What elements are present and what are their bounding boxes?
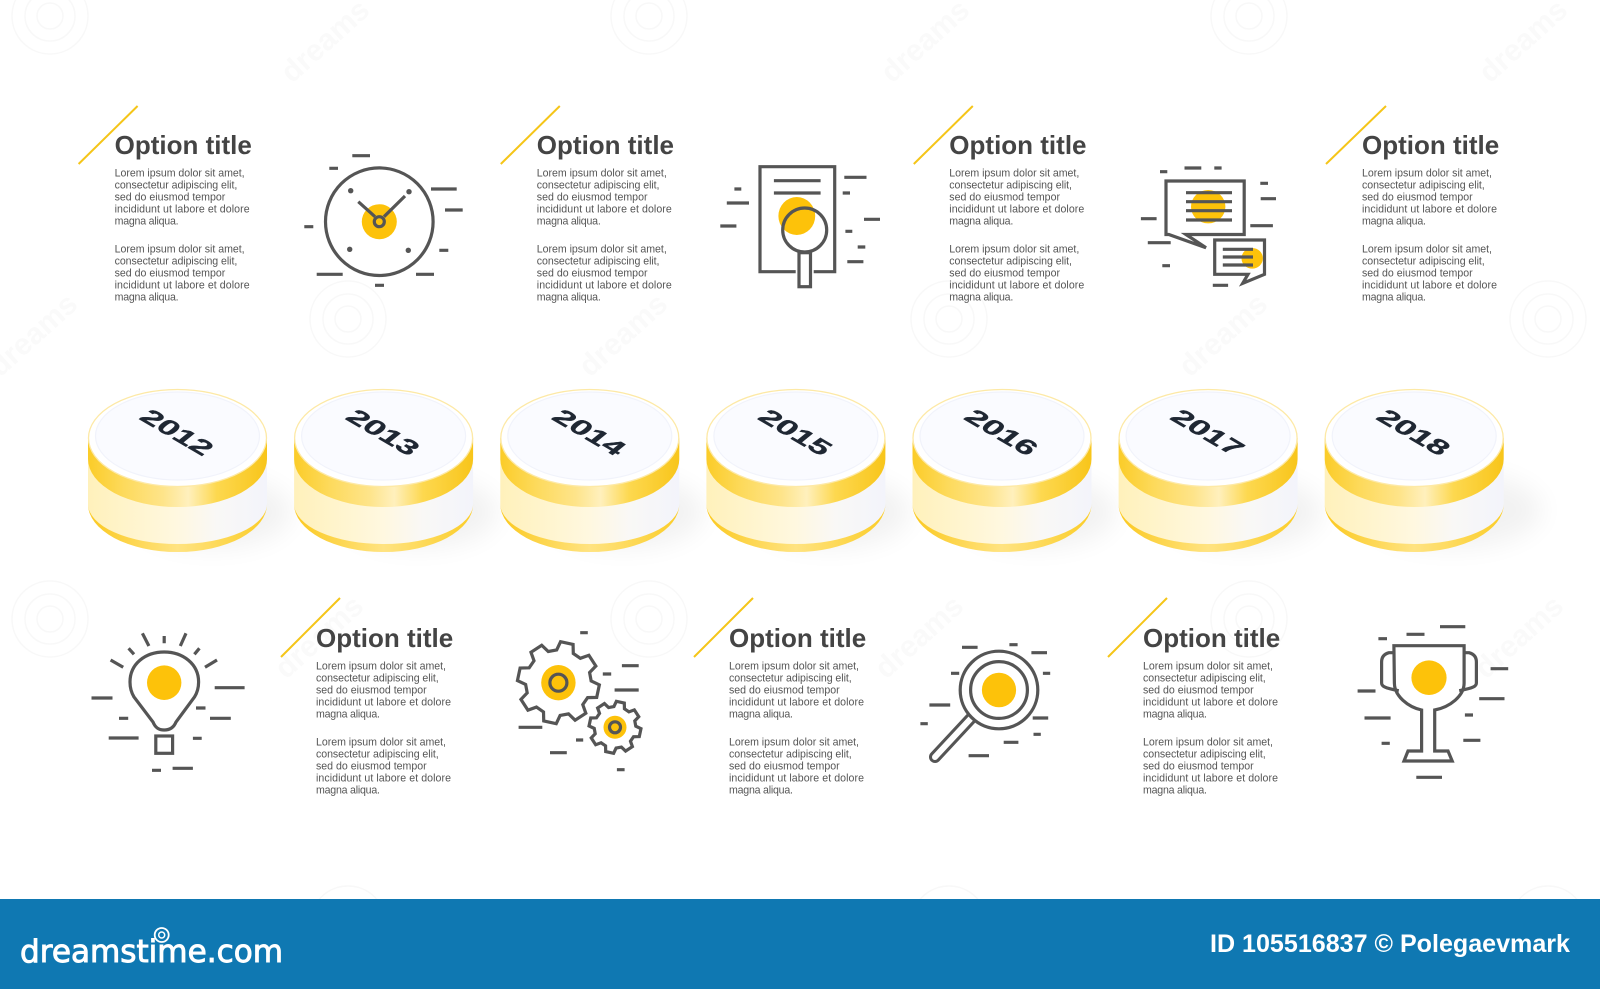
body text: sed do eiusmod tempor [316, 760, 427, 772]
body text: consectetur adipiscing elit, [949, 180, 1072, 192]
cylinder 2015: 2015 [752, 405, 838, 460]
body text: sed do eiusmod tempor [115, 192, 226, 204]
cylinder shadows [132, 472, 1542, 548]
body text: consectetur adipiscing elit, [729, 673, 852, 685]
body text: sed do eiusmod tempor [949, 267, 1060, 279]
body text [316, 661, 451, 796]
text block: bottom 1 [281, 598, 453, 796]
footer credit: ID 105516837 © Polegaevmark [1210, 930, 1570, 958]
body text: magna aliqua. [949, 291, 1013, 303]
body text: incididunt ut labore et dolore [949, 204, 1084, 216]
body text: Lorem ipsum dolor sit amet, [1143, 736, 1273, 748]
body text: sed do eiusmod tempor [537, 192, 648, 204]
body text: magna aliqua. [1143, 709, 1207, 721]
cylinder 2018: 2018 [1370, 405, 1456, 460]
body text: magna aliqua. [1362, 291, 1426, 303]
watermark pattern: dreams [573, 287, 674, 383]
body text: incididunt ut labore et dolore [949, 279, 1084, 291]
body text: incididunt ut labore et dolore [537, 279, 672, 291]
title: Option title [115, 130, 252, 160]
body text: sed do eiusmod tempor [1362, 192, 1473, 204]
body text: Lorem ipsum dolor sit amet, [1143, 661, 1273, 673]
body text: magna aliqua. [1362, 216, 1426, 228]
body text: incididunt ut labore et dolore [729, 772, 864, 784]
title: Option title [316, 623, 453, 653]
body text: sed do eiusmod tempor [1362, 267, 1473, 279]
body text: Lorem ipsum dolor sit amet, [537, 243, 667, 255]
body text: sed do eiusmod tempor [729, 760, 840, 772]
body text: magna aliqua. [537, 291, 601, 303]
body text: incididunt ut labore et dolore [1143, 772, 1278, 784]
body text: incididunt ut labore et dolore [115, 279, 250, 291]
body text: consectetur adipiscing elit, [115, 180, 237, 192]
body text [729, 661, 864, 796]
footer logo: dreamstime.com [20, 934, 283, 970]
body text: incididunt ut labore et dolore [1362, 204, 1497, 216]
watermark pattern: dreams [269, 589, 370, 685]
watermark pattern: dreams [1469, 589, 1570, 685]
body text: magna aliqua. [1143, 784, 1207, 796]
body text: consectetur adipiscing elit, [537, 255, 659, 267]
body text: consectetur adipiscing elit, [1143, 673, 1266, 685]
watermark pattern: dreams [1173, 287, 1274, 383]
cylinder 2014 [500, 390, 679, 552]
body text: sed do eiusmod tempor [949, 192, 1060, 204]
body text: Lorem ipsum dolor sit amet, [316, 661, 446, 673]
body text [949, 168, 1084, 303]
body text: Lorem ipsum dolor sit amet, [1362, 168, 1492, 180]
icon: clock [304, 156, 463, 285]
icon: light bulb [92, 633, 245, 770]
body text: incididunt ut labore et dolore [537, 204, 672, 216]
icon: magnifying glass [920, 645, 1050, 757]
body text: incididunt ut labore et dolore [1362, 279, 1497, 291]
body text: Lorem ipsum dolor sit amet, [537, 168, 667, 180]
body text: magna aliqua. [729, 709, 793, 721]
cylinder 2017 [1119, 390, 1298, 552]
body text: incididunt ut labore et dolore [729, 697, 864, 709]
title: Option title [1362, 130, 1499, 160]
text block: top 4 [1326, 106, 1499, 303]
body text: Lorem ipsum dolor sit amet, [949, 243, 1079, 255]
cylinder 2013: 2013 [340, 405, 426, 460]
body text: Lorem ipsum dolor sit amet, [949, 168, 1079, 180]
body text: Lorem ipsum dolor sit amet, [115, 243, 245, 255]
title: Option title [1143, 623, 1280, 653]
body text [1143, 661, 1278, 796]
footer bar [0, 899, 1600, 989]
body text: magna aliqua. [115, 291, 179, 303]
cylinder 2015 [706, 390, 885, 552]
body text: consectetur adipiscing elit, [1362, 255, 1485, 267]
body text: consectetur adipiscing elit, [316, 748, 439, 760]
body text: Lorem ipsum dolor sit amet, [115, 168, 245, 180]
timeline cylinders [88, 390, 1504, 552]
text block: bottom 3 [1108, 598, 1280, 796]
body text: sed do eiusmod tempor [537, 267, 648, 279]
body text: sed do eiusmod tempor [1143, 685, 1254, 697]
cylinder 2012 [88, 390, 267, 552]
body text: consectetur adipiscing elit, [316, 673, 439, 685]
cylinder 2013 [294, 390, 473, 552]
title: Option title [949, 130, 1087, 160]
body text: Lorem ipsum dolor sit amet, [729, 736, 859, 748]
title: Option title [537, 130, 674, 160]
body text: consectetur adipiscing elit, [1362, 180, 1485, 192]
body text: magna aliqua. [949, 216, 1013, 228]
body text [115, 168, 250, 303]
body text: Lorem ipsum dolor sit amet, [316, 736, 446, 748]
text block: top 1 [79, 106, 252, 303]
cylinder 2018 [1325, 390, 1504, 552]
cylinder 2017: 2017 [1164, 405, 1250, 460]
body text [537, 168, 672, 303]
icon: gears [510, 633, 645, 770]
body text: magna aliqua. [316, 784, 380, 796]
cylinder 2014: 2014 [546, 405, 633, 461]
icon: document with magnifier [720, 167, 880, 287]
body text: magna aliqua. [537, 216, 601, 228]
body text: consectetur adipiscing elit, [729, 748, 852, 760]
watermark pattern: dreams [869, 589, 970, 685]
text block: top 3 [914, 106, 1087, 303]
text block: bottom 2 [694, 598, 866, 796]
body text: consectetur adipiscing elit, [115, 255, 237, 267]
body text: consectetur adipiscing elit, [1143, 748, 1266, 760]
icon: trophy [1358, 627, 1508, 777]
cylinder 2016: 2016 [958, 405, 1044, 460]
body text: sed do eiusmod tempor [729, 685, 840, 697]
body text: magna aliqua. [316, 709, 380, 721]
icon: chat bubbles [1141, 168, 1276, 285]
body text: incididunt ut labore et dolore [115, 204, 250, 216]
body text: Lorem ipsum dolor sit amet, [1362, 243, 1492, 255]
body text: incididunt ut labore et dolore [1143, 697, 1278, 709]
body text: consectetur adipiscing elit, [537, 180, 659, 192]
title: Option title [729, 623, 866, 653]
body text: sed do eiusmod tempor [316, 685, 427, 697]
body text: magna aliqua. [729, 784, 793, 796]
body text: consectetur adipiscing elit, [949, 255, 1072, 267]
cylinder 2016 [912, 390, 1092, 552]
body text [1362, 168, 1497, 303]
cylinder 2012: 2012 [134, 405, 220, 460]
body text: sed do eiusmod tempor [115, 267, 226, 279]
body text: sed do eiusmod tempor [1143, 760, 1254, 772]
body text: magna aliqua. [115, 216, 179, 228]
body text: incididunt ut labore et dolore [316, 772, 451, 784]
body text: Lorem ipsum dolor sit amet, [729, 661, 859, 673]
text block: top 2 [501, 106, 674, 303]
body text: incididunt ut labore et dolore [316, 697, 451, 709]
